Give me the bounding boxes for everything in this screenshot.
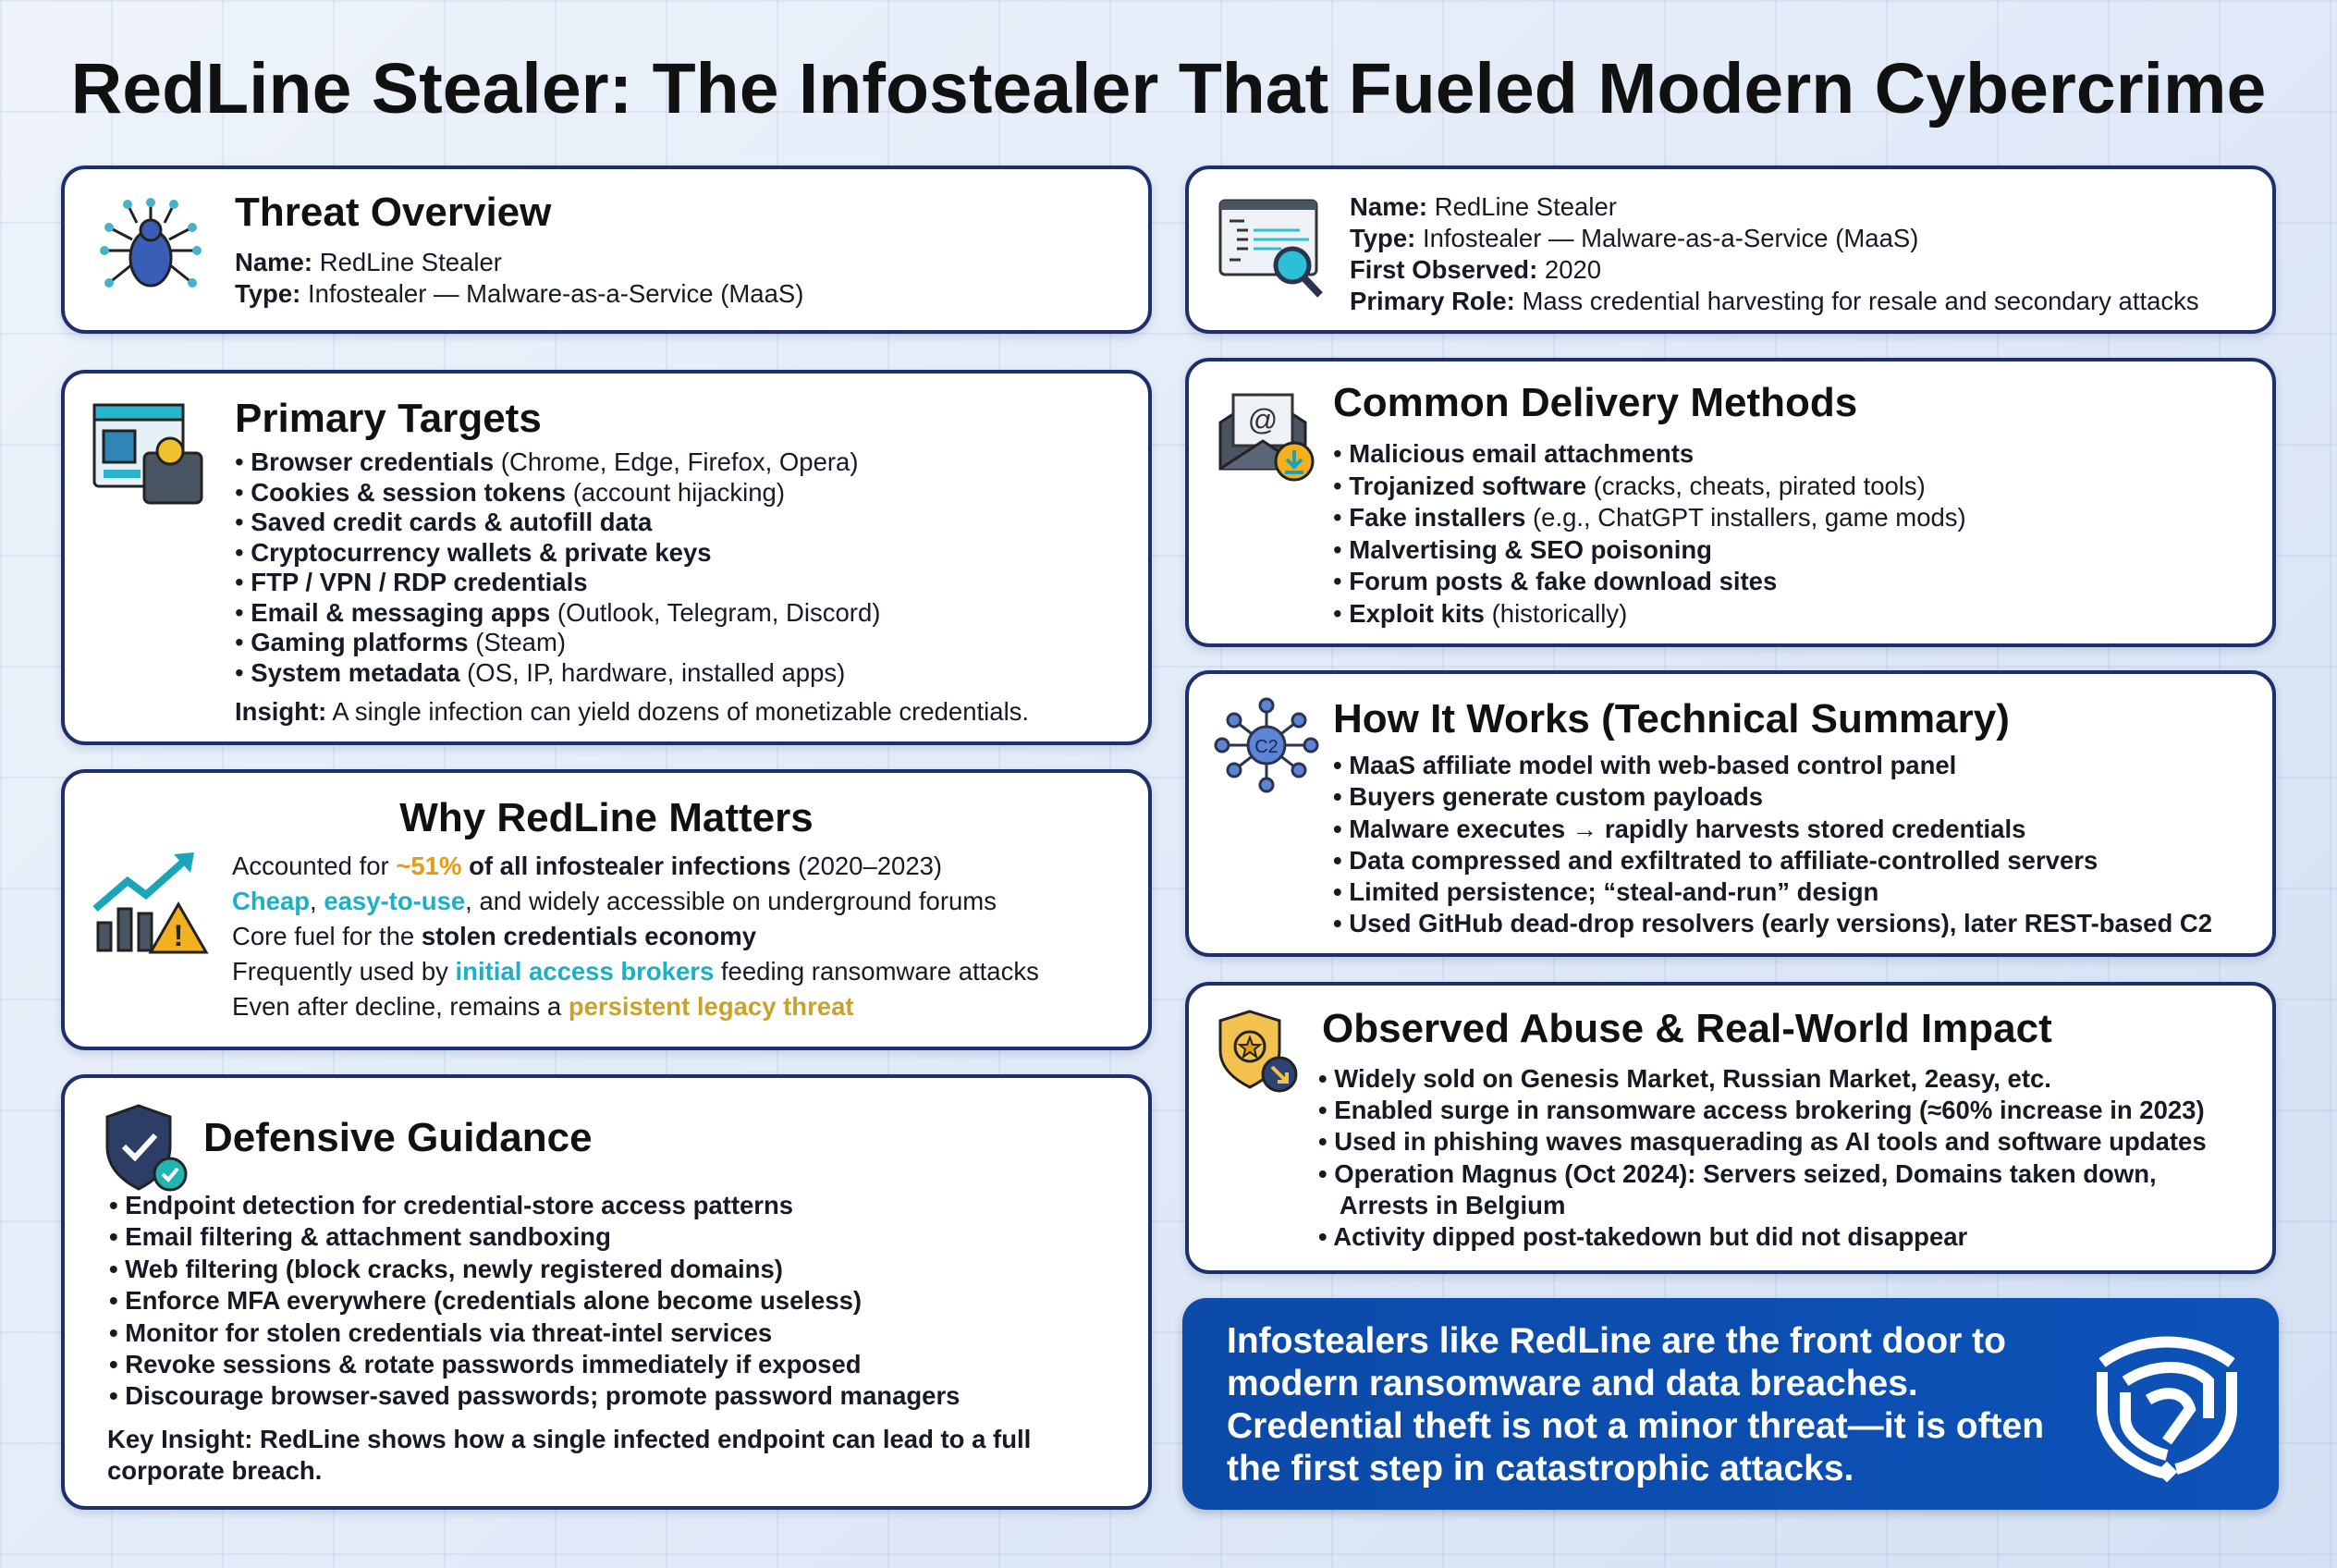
text: First Observed: 2020 [1350, 255, 1601, 284]
icon: c2 network [1215, 697, 1318, 793]
list: • Malicious email attachments [1333, 439, 1694, 468]
text: Infostealers like RedLine are the front door to [1227, 1321, 2006, 1361]
text: Accounted for ~51% of all infostealer infections (2020–2023) [232, 851, 942, 880]
list: • Malvertising & SEO poisoning [1333, 534, 1712, 564]
list: • Buyers generate custom payloads [1333, 782, 1763, 811]
icon: c2 network: C2 [1254, 737, 1279, 757]
list: • Endpoint detection for credential-store access patterns [109, 1191, 793, 1219]
list: • Monitor for stolen credentials via threat-intel services [109, 1318, 772, 1347]
text: Frequently used by initial access brokers feeding ransomware attacks [232, 957, 1039, 986]
list: • Fake installers (e.g., ChatGPT installers, game mods) [1333, 503, 1966, 532]
list: • System metadata (OS, IP, hardware, installed apps) [235, 658, 845, 686]
icon: chart warning [92, 852, 209, 954]
list [1333, 751, 2212, 937]
list: • Cryptocurrency wallets & private keys [235, 538, 712, 566]
icon: shield [105, 1104, 187, 1191]
list: • Malware executes → rapidly harvests stored credentials [1333, 815, 2025, 843]
panel: name summary [1185, 165, 2276, 334]
heading: Threat Overview [235, 190, 551, 235]
icon: bug [100, 198, 202, 288]
list: • Browser credentials (Chrome, Edge, Firefox, Opera) [235, 447, 858, 476]
icon: shield logo [2097, 1337, 2237, 1483]
text: Cheap, easy-to-use, and widely accessible on underground forums [232, 887, 997, 915]
text: Name: RedLine Stealer [1350, 192, 1617, 221]
icon: email download: @ [1248, 403, 1278, 436]
list: • Limited persistence; “steal-and-run” design [1333, 877, 1878, 906]
list: • Enforce MFA everywhere (credentials alone become useless) [109, 1286, 862, 1315]
list: • Web filtering (block cracks, newly registered domains) [109, 1255, 783, 1283]
text [1350, 192, 2199, 315]
callout: conclusion [1182, 1298, 2279, 1510]
text: Credential theft is not a minor threat—it is often [1227, 1406, 2044, 1446]
list [1333, 439, 1966, 628]
list: • Data compressed and exfiltrated to affiliate-controlled servers [1333, 846, 2098, 875]
list [1318, 1064, 2207, 1251]
panel: threat overview [61, 165, 1152, 334]
text: Core fuel for the stolen credentials economy [232, 922, 756, 950]
panel: why redline matters [61, 769, 1152, 1050]
panel: how it works [1185, 670, 2276, 957]
list: • Email & messaging apps (Outlook, Telegram, Discord) [235, 597, 880, 627]
text [1227, 1321, 2044, 1488]
list: • FTP / VPN / RDP credentials [235, 568, 588, 596]
list [109, 1191, 960, 1410]
text: Type: Infostealer — Malware-as-a-Service (MaaS) [1350, 224, 1918, 252]
insight: Insight: A single infection can yield dozens of monetizable credentials. [235, 697, 1029, 726]
list: • Operation Magnus (Oct 2024): Servers seized, Domains taken down, [1318, 1159, 2157, 1188]
heading: Primary Targets [235, 396, 542, 441]
heading: Defensive Guidance [203, 1115, 593, 1160]
icon: browser wallet [92, 403, 203, 505]
text: modern ransomware and data breaches. [1227, 1364, 1918, 1403]
text: Type: Infostealer — Malware-as-a-Service (MaaS) [235, 279, 803, 308]
list: • Cookies & session tokens (account hijacking) [235, 477, 785, 507]
text: the first step in catastrophic attacks. [1227, 1449, 1854, 1488]
icon: email download [1218, 393, 1315, 481]
key insight [107, 1425, 1031, 1485]
list: • MaaS affiliate model with web-based control panel [1333, 751, 1956, 779]
list: • Exploit kits (historically) [1333, 599, 1627, 627]
list: • Forum posts & fake download sites [1333, 567, 1777, 595]
list: • Email filtering & attachment sandboxing [109, 1222, 611, 1251]
list: • Discourage browser-saved passwords; promote password managers [109, 1381, 960, 1410]
icon: code search [1218, 200, 1323, 298]
list: • Trojanized software (cracks, cheats, pirated tools) [1333, 472, 1926, 499]
list [235, 447, 880, 687]
heading: Common Delivery Methods [1333, 380, 1857, 425]
list: • Gaming platforms (Steam) [235, 628, 566, 656]
title: RedLine Stealer: The Infostealer That Fueled Modern Cybercrime [71, 49, 2266, 129]
key insight: Key Insight: RedLine shows how a single infected endpoint can lead to a full [107, 1425, 1031, 1453]
heading: Observed Abuse & Real-World Impact [1322, 1006, 2052, 1051]
text: Name: RedLine Stealer [235, 248, 502, 276]
list: • Revoke sessions & rotate passwords immediately if exposed [109, 1350, 862, 1378]
panel: observed abuse [1185, 982, 2276, 1274]
panel: defensive guidance [61, 1074, 1152, 1510]
panel: delivery methods [1185, 358, 2276, 647]
icon: chart warning: ! [174, 919, 183, 952]
text: Even after decline, remains a persistent legacy threat [232, 992, 854, 1021]
list: • Saved credit cards & autofill data [235, 508, 652, 536]
list: • Enabled surge in ransomware access brokering (≈60% increase in 2023) [1318, 1096, 2205, 1124]
icon: badge [1218, 1010, 1298, 1093]
text [235, 248, 803, 308]
heading: Why RedLine Matters [399, 795, 814, 840]
list: • Widely sold on Genesis Market, Russian Market, 2easy, etc. [1318, 1064, 2051, 1093]
list: • Activity dipped post-takedown but did not disappear [1318, 1222, 1967, 1251]
list: Arrests in Belgium [1340, 1191, 1565, 1219]
panel: primary targets [61, 370, 1152, 745]
text: Primary Role: Mass credential harvesting for resale and secondary attacks [1350, 287, 2199, 315]
heading: How It Works (Technical Summary) [1333, 696, 2010, 741]
list: • Used in phishing waves masquerading as AI tools and software updates [1318, 1127, 2207, 1156]
list: • Used GitHub dead-drop resolvers (early versions), later REST-based C2 [1333, 909, 2212, 937]
text [232, 851, 1039, 1021]
key insight: corporate breach. [107, 1456, 322, 1485]
